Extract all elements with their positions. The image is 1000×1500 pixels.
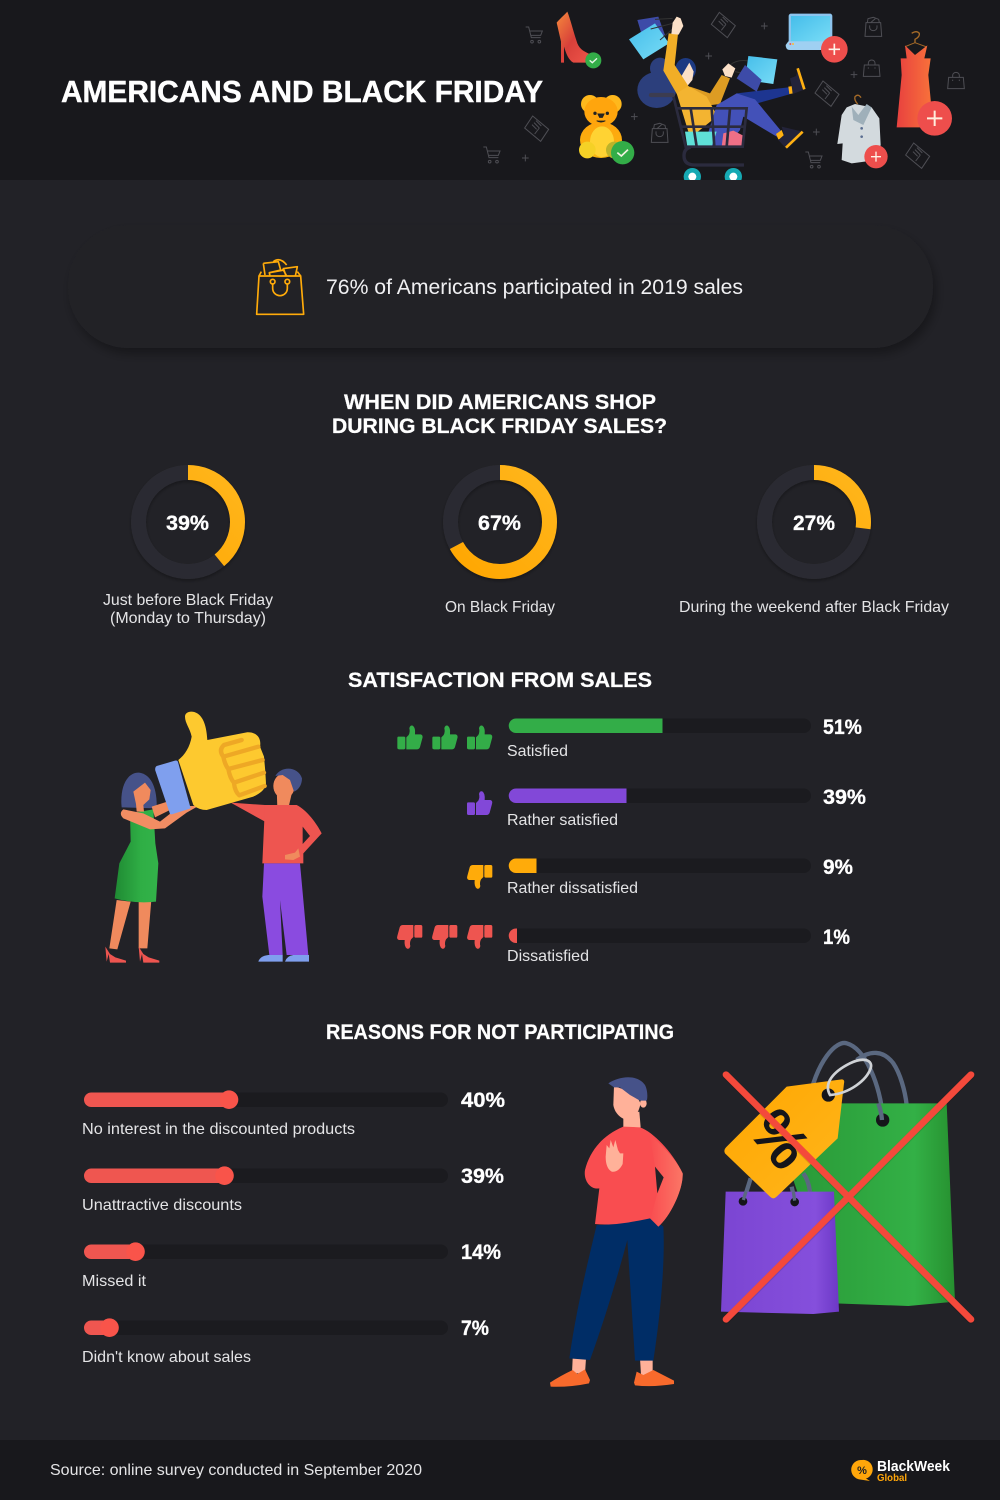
slider row: unattractive discounts 39%	[82, 1165, 504, 1214]
bar row: rather satisfied 39%: 39%	[823, 786, 866, 809]
bar row: rather satisfied 39%	[467, 786, 866, 829]
purple bag	[721, 1173, 839, 1314]
slider row: didn't know about sales 7%	[82, 1317, 489, 1366]
icon: woman riding shopping cart	[629, 17, 805, 185]
bar row: satisfied 51%	[397, 716, 862, 760]
header illustration: shopping scene	[483, 12, 964, 185]
slider row: missed it 14%: Missed it	[82, 1273, 147, 1290]
bar row: rather satisfied 39%: Rather satisfied	[507, 812, 618, 829]
slider row: no interest 40%: No interest in the discounted products	[82, 1121, 355, 1138]
bar row: satisfied 51%: Satisfied	[507, 743, 568, 760]
slider row: no interest 40%: 40%	[461, 1089, 505, 1112]
illustration: couple holding giant thumb	[105, 712, 322, 963]
logo: BlackWeek Global: Global	[877, 1472, 907, 1484]
red cross	[726, 1075, 971, 1319]
background outline icons	[483, 12, 964, 168]
title: AMERICANS AND BLACK FRIDAY	[61, 74, 543, 109]
source note: Source: online survey conducted in September 2020	[50, 1462, 422, 1479]
donut chart: weekend after 27%: 27%	[793, 512, 835, 535]
heading: when did Americans shop: WHEN DID AMERICANS SHOP	[344, 391, 656, 414]
discount tag	[724, 1060, 871, 1198]
slider row: didn't know about sales 7%: Didn't know about sales	[82, 1349, 251, 1366]
header band	[0, 0, 1000, 180]
logo: BlackWeek Global	[851, 1458, 951, 1484]
slider row: missed it 14%	[82, 1241, 501, 1290]
slider row: unattractive discounts 39%: 39%	[461, 1165, 504, 1188]
bar row: dissatisfied 1%: 1%	[823, 926, 850, 949]
icon: shirt dress	[897, 32, 952, 136]
bar row: rather dissatisfied 9%	[467, 856, 853, 897]
donut chart: weekend after 27%	[679, 472, 949, 616]
slider row: no interest 40%	[82, 1089, 505, 1138]
footer band	[0, 1440, 1000, 1500]
heading: reasons for not participating: REASONS FOR NOT PARTICIPATING	[326, 1021, 674, 1044]
panel: 76% participation pill	[68, 225, 933, 348]
heading: when did Americans shop: DURING BLACK FRIDAY SALES?	[332, 415, 667, 438]
donut chart: just before Black Friday 39%	[103, 472, 273, 627]
donut chart: on Black Friday 67%	[445, 472, 555, 616]
icon: teddy bear	[579, 95, 634, 164]
heading: when did Americans shop	[332, 391, 667, 438]
bar row: rather dissatisfied 9%: 9%	[823, 856, 853, 879]
icon: coat	[837, 95, 888, 168]
heading: satisfaction from sales: SATISFACTION FROM SALES	[348, 669, 652, 692]
logo: BlackWeek Global: %	[857, 1465, 867, 1477]
bar row: satisfied 51%: 51%	[823, 716, 862, 739]
donut chart: weekend after 27%: During the weekend after Black Friday	[679, 599, 949, 616]
logo: BlackWeek Global: BlackWeek	[877, 1458, 951, 1475]
icon: laptop	[786, 14, 848, 63]
slider row: didn't know about sales 7%: 7%	[461, 1317, 489, 1340]
donut chart: just before Black Friday 39%: Just before Black Friday	[103, 592, 273, 609]
illustration: man refusing with raised hand	[550, 1077, 683, 1387]
icon: high heel	[557, 12, 601, 68]
bar row: rather dissatisfied 9%: Rather dissatisfied	[507, 880, 638, 897]
donut chart: on Black Friday 67%: On Black Friday	[445, 599, 555, 616]
slider row: unattractive discounts 39%: Unattractive discounts	[82, 1197, 242, 1214]
donut chart: just before Black Friday 39%: (Monday to Thursday)	[110, 610, 266, 627]
slider row: missed it 14%: 14%	[461, 1241, 501, 1264]
donut chart: just before Black Friday 39%: 39%	[166, 512, 209, 535]
illustration: crossed-out shopping bags and discount tag	[721, 1043, 971, 1319]
discount tag: %	[736, 1096, 824, 1183]
bar row: dissatisfied 1%	[397, 925, 850, 965]
green bag	[793, 1043, 955, 1306]
bar row: dissatisfied 1%: Dissatisfied	[507, 948, 589, 965]
icon: shopping bag	[257, 260, 304, 314]
donut chart: on Black Friday 67%: 67%	[478, 512, 521, 535]
participation text: 76% of Americans participated in 2019 sales	[326, 276, 743, 299]
